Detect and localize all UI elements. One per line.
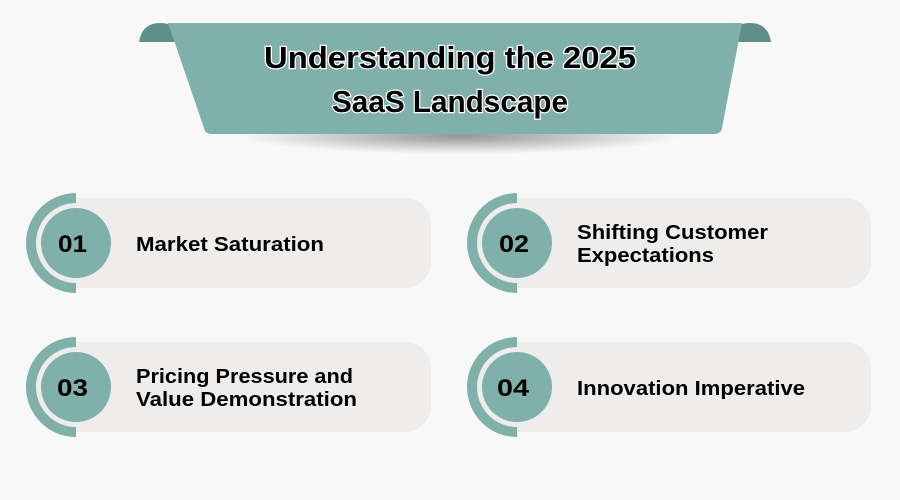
item 03: Value Demonstration — [136, 389, 357, 411]
item 02: Expectations — [577, 245, 714, 267]
title: Understanding the 2025 — [264, 40, 636, 75]
item 04 — [467, 337, 871, 437]
banner — [139, 23, 771, 154]
item 02 — [467, 193, 871, 293]
item 01 — [26, 193, 431, 293]
item 02: Shifting Customer — [577, 222, 768, 244]
item 01: Market Saturation — [136, 234, 324, 256]
item 04: 04 — [497, 375, 530, 402]
title line 2: SaaS Landscape — [332, 84, 568, 119]
item 02: 02 — [499, 231, 529, 258]
item 01: 01 — [58, 231, 87, 258]
item 03: 03 — [57, 375, 88, 402]
item 03 — [26, 337, 431, 437]
item 03: Pricing Pressure and — [136, 366, 353, 388]
item 04: Innovation Imperative — [577, 378, 805, 400]
